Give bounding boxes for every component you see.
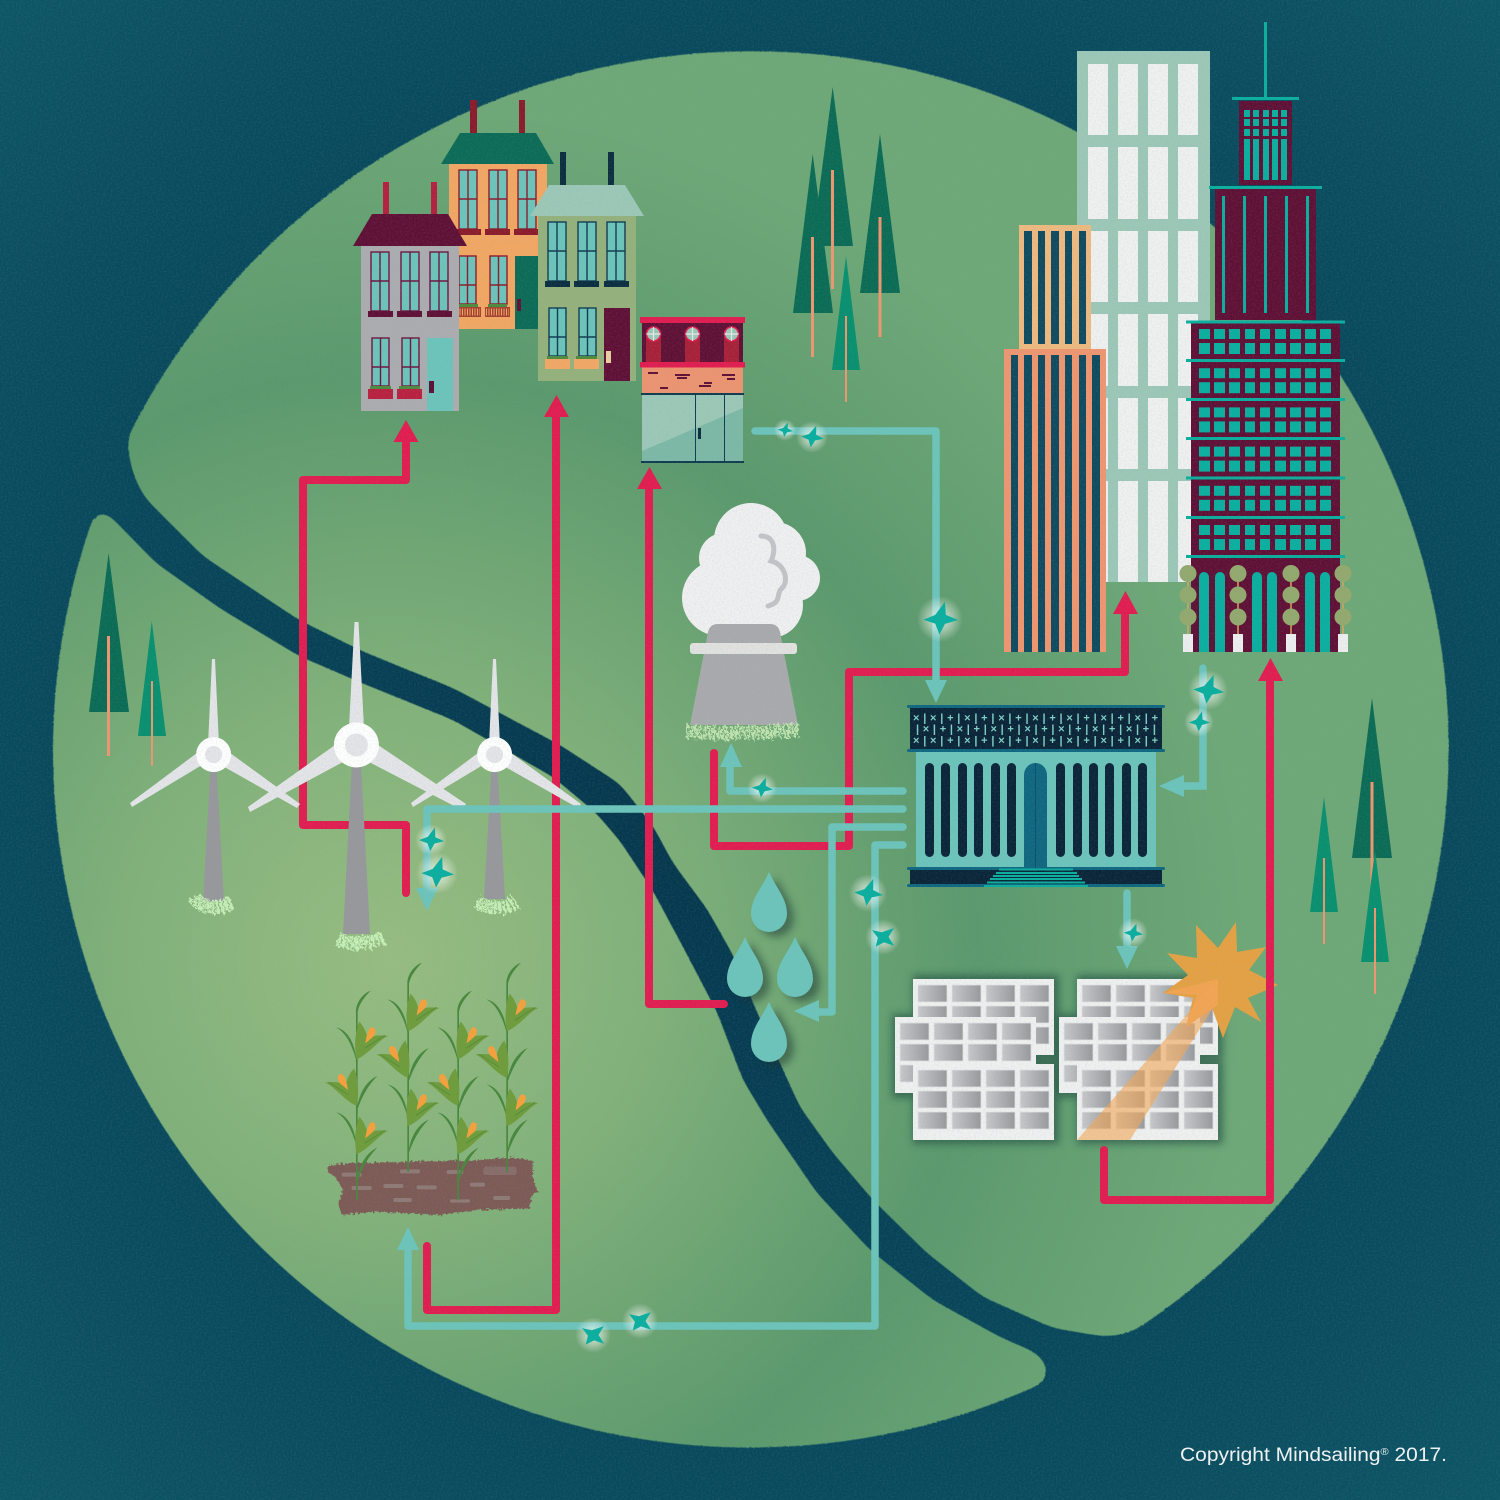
land: southern river bank: [53, 512, 1047, 1448]
power plant: steam cloud and cooling tower: [682, 503, 820, 733]
frieze pattern: × | × | + | × | + | × | + | × | + | × | + | × | + | × | +: [913, 712, 1158, 724]
water drops: [727, 872, 820, 1067]
house: orange: [441, 100, 554, 329]
wind turbines: [130, 622, 581, 943]
teal flow lines: [397, 431, 1203, 1326]
panel shadows: [892, 975, 1223, 1144]
arrow: temple to corn: [397, 845, 903, 1326]
skyscraper: orange striped tower: [1004, 225, 1106, 652]
arrow: turbines to grey house: [303, 420, 418, 893]
arrow: shop to temple: [755, 431, 947, 703]
sun: [1163, 922, 1278, 1038]
central building: temple: [907, 705, 1165, 887]
pine trees: right: [1310, 698, 1392, 994]
arrow: power plant to towers: [714, 591, 1138, 846]
arrow: temple to turbines: [416, 809, 903, 911]
turbine left: [130, 659, 300, 907]
skyscraper: maroon tiered tower: [1180, 22, 1352, 652]
frieze pattern: × | × | + | × | + | × | + | × | + | × | + | × | + | × | +: [913, 735, 1158, 747]
land: northern river bank: [128, 51, 1449, 1336]
pine trees: top centre: [793, 87, 900, 402]
red flow lines: [303, 395, 1283, 1310]
energy sparkles: [415, 419, 1228, 1353]
soil: [328, 1157, 538, 1215]
arrow: temple to solar panels: [1116, 893, 1138, 969]
skyscraper: pale glass tower: [1077, 51, 1210, 582]
arrow: temple to water: [794, 827, 903, 1022]
house: green: [530, 152, 644, 381]
arrow: solar to maroon tower: [1104, 658, 1283, 1200]
steam cloud: [682, 503, 820, 638]
cooling tower: [690, 624, 798, 725]
turbine middle: [248, 622, 466, 943]
shop building: [640, 317, 745, 463]
corn plants: [325, 963, 539, 1200]
corn field: [325, 963, 539, 1215]
arrow: temple to power plant: [720, 743, 903, 791]
arrow: tower to temple: [1159, 668, 1203, 797]
turbine right: [411, 659, 581, 908]
frieze pattern: [913, 712, 1158, 747]
arrow: corn to green house: [427, 395, 569, 1310]
solar panels and sun: [892, 922, 1278, 1144]
copyright text: 2017.: [1389, 1445, 1447, 1466]
house: grey: [353, 182, 467, 411]
copyright text: ®: [1381, 1447, 1389, 1458]
pine trees: left: [89, 553, 166, 766]
arrow: water to shop: [637, 467, 724, 1004]
copyright text: Copyright Mindsailing: [1180, 1445, 1362, 1466]
reflected light beam: [1077, 979, 1218, 1140]
frieze pattern: | × | + | × | + | × | + | × | + | × | + | × | + | × | + |: [916, 724, 1156, 736]
